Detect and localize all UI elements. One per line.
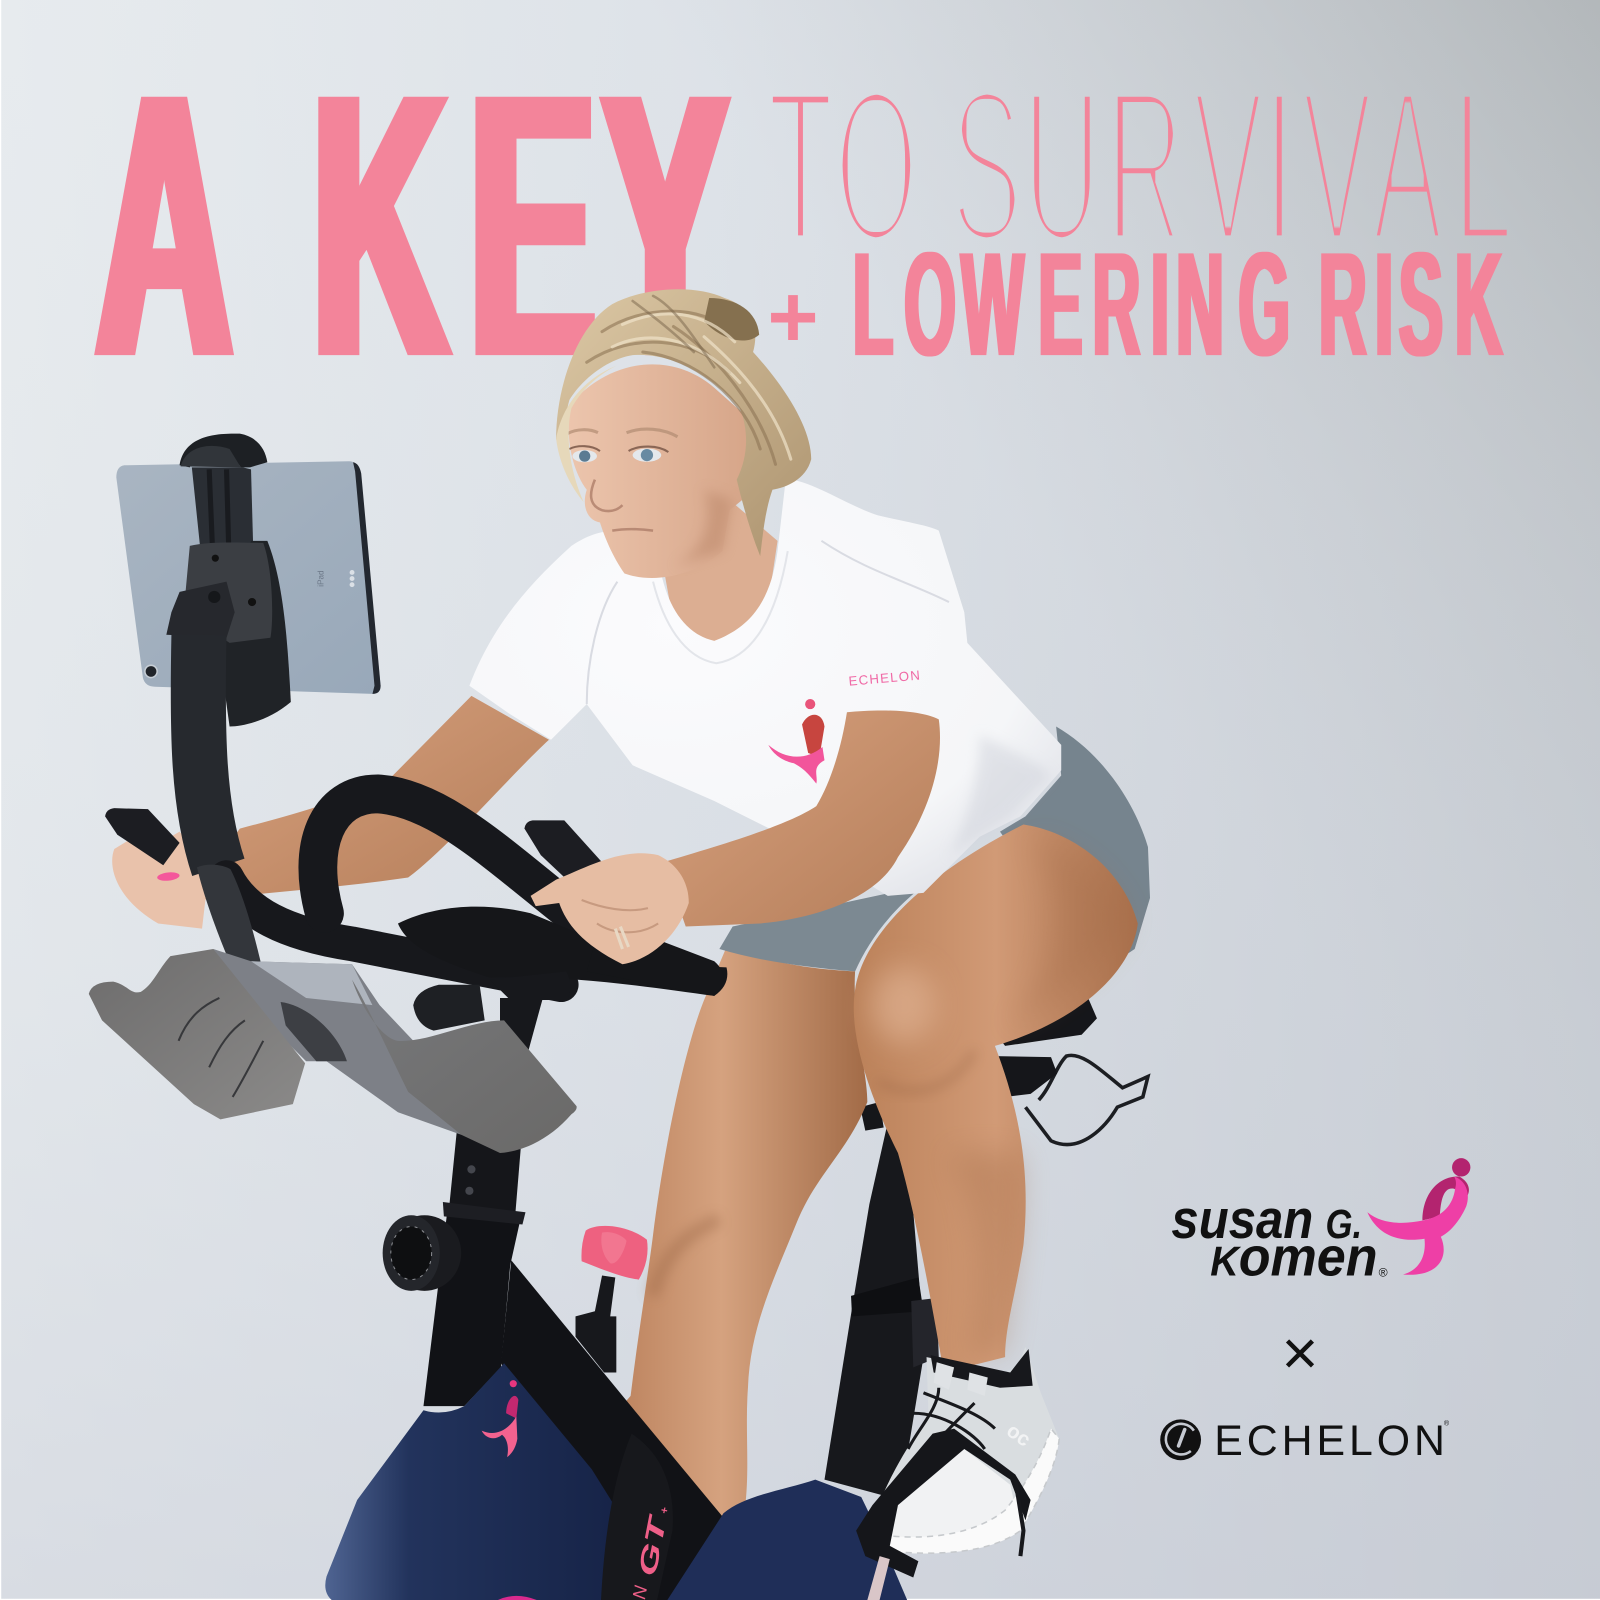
woman: torso and head [469, 289, 1061, 964]
hand [112, 832, 209, 929]
shorts front [719, 886, 923, 971]
clamp [166, 582, 235, 638]
seat rail [860, 1056, 1057, 1131]
navy right housing [667, 1480, 907, 1600]
mount back [219, 541, 291, 727]
centre wedge [398, 907, 727, 996]
bike ribbon logo [482, 1380, 518, 1457]
cap inner [181, 446, 241, 467]
ear [747, 407, 774, 470]
tablet dots [350, 570, 354, 587]
crank cover [601, 1434, 673, 1600]
registered mark: ® [1379, 1266, 1388, 1280]
neck [663, 500, 778, 653]
near arm [663, 710, 940, 927]
near hand [531, 853, 689, 964]
thigh and calf [854, 824, 1138, 1372]
toe white [867, 1449, 1020, 1554]
collar band [653, 551, 788, 663]
right aero grip [524, 820, 602, 890]
wordmark: susan: susan [1171, 1188, 1313, 1250]
wordmark: G.: G. [1326, 1201, 1362, 1247]
nose and mouth [591, 480, 653, 531]
wordmark: komen: Komen [1210, 1226, 1378, 1288]
logo: Susan G. Komen [1171, 1158, 1470, 1288]
shirt sleeve wordmark: ECHELON [848, 667, 922, 689]
hair strands and bun [587, 296, 791, 464]
seat post collar [851, 1278, 923, 1316]
hair [556, 289, 811, 556]
fringe strand [556, 365, 617, 502]
left aero grip [105, 808, 180, 865]
arc bar [318, 794, 612, 944]
upper post behind tray [500, 998, 543, 1061]
stem collar [197, 865, 261, 969]
title: LOWERING RISK: LOWERING RISK [853, 222, 1503, 387]
eyes [567, 429, 678, 462]
title: plus sign: + [767, 268, 819, 366]
tension knob upper [413, 985, 485, 1031]
shirt ribbon logo [768, 699, 824, 784]
bar end clamp [490, 971, 570, 1000]
on logo tabs [934, 1362, 988, 1396]
tablet mount [166, 434, 291, 727]
navy shroud [325, 1363, 624, 1600]
tablet edge [353, 462, 381, 694]
console dark centre [281, 1002, 347, 1061]
title [96, 15, 1513, 435]
collar [931, 1349, 1033, 1388]
right tray [352, 980, 577, 1153]
woman: far leg [602, 947, 867, 1561]
forearm and upper arm [199, 696, 549, 900]
shoe brand mark: oc [1002, 1420, 1034, 1451]
pedal crank strip [867, 1556, 890, 1600]
nail [157, 871, 180, 882]
t-shirt [469, 479, 1061, 896]
frame lettering: GT [634, 1511, 673, 1579]
shoe upper [867, 1347, 1059, 1554]
centre console [213, 949, 480, 1135]
woman: far knee crease [653, 1219, 719, 1296]
bike: seat assembly [824, 988, 1148, 1500]
handlebars [105, 635, 727, 1000]
face [569, 364, 767, 578]
post collar [443, 1202, 526, 1224]
bike: main frame: + [659, 1506, 672, 1515]
mount head [184, 542, 272, 643]
thigh shadow [1005, 837, 1128, 1031]
handlebar post [423, 1214, 520, 1406]
calf shadow [949, 1153, 1021, 1357]
laces [908, 1388, 995, 1459]
shirt sleeve seam [587, 541, 949, 704]
bike: bottle tray [89, 949, 577, 1153]
right bar end [587, 918, 723, 996]
woman: far arm [112, 696, 549, 929]
ribbon icon [1367, 1158, 1470, 1275]
tablet [116, 461, 381, 694]
magenta base [498, 1596, 537, 1600]
shirt body shadow [949, 735, 1051, 857]
resistance stem [576, 1276, 616, 1372]
echelon icon [1160, 1419, 1201, 1460]
woman: near leg [854, 824, 1138, 1372]
kneecap highlight [870, 966, 936, 1044]
tablet stem [198, 635, 218, 867]
logo: Echelon [1160, 1417, 1450, 1465]
tray ribs [179, 998, 263, 1097]
column [192, 467, 253, 546]
cable [1026, 1055, 1148, 1145]
adjustment knob [383, 1215, 461, 1291]
loose strap [1015, 1480, 1023, 1556]
cheek shadow [673, 490, 733, 566]
knob highlight [601, 1232, 627, 1263]
pedal cage [856, 1429, 1031, 1578]
camera [145, 665, 157, 678]
sole [888, 1429, 1059, 1553]
lower bar sweep [227, 878, 561, 985]
registered mark: ® [1444, 1420, 1450, 1428]
pink resistance knob [581, 1226, 648, 1280]
knee crease [878, 1051, 974, 1091]
title: A KEY: A KEY [96, 15, 728, 435]
tablet body [116, 461, 381, 694]
collaboration x: × [1282, 1318, 1318, 1388]
title: TO SURVIVAL: TO SURVIVAL [768, 45, 1513, 288]
shorts back [1000, 727, 1150, 967]
tablet wordmark: iPad [316, 570, 325, 587]
seat post clamp [911, 1298, 939, 1367]
saddle [995, 988, 1097, 1046]
left tray [89, 949, 305, 1119]
bike: main frame [325, 998, 907, 1600]
finger lines [582, 900, 658, 932]
head post upper [449, 1128, 522, 1214]
ring [615, 927, 629, 949]
woman: shorts [719, 727, 1150, 971]
frame triangle [501, 1260, 737, 1600]
shoe and pedal [856, 1347, 1059, 1600]
seat post [824, 1122, 923, 1500]
console highlight [251, 961, 372, 1005]
echelon wordmark: ECHELON [1214, 1417, 1445, 1465]
clip cap [180, 434, 267, 467]
